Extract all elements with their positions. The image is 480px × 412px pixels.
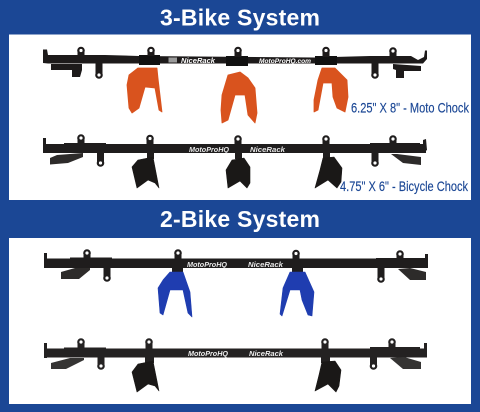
label: NiceRack: NiceRack [249, 351, 284, 358]
mounting tabs [77, 134, 397, 167]
rack: 2-bike with bicycle chocks [44, 338, 427, 392]
heading: 3-Bike System: 3-Bike System [160, 4, 320, 30]
label: MotoProHQ: MotoProHQ [189, 147, 230, 154]
hitch right [398, 268, 426, 280]
chock: orange 3 [314, 68, 348, 112]
mounting tabs [51, 47, 421, 79]
mounting tabs [77, 338, 396, 370]
mounting tabs [83, 249, 404, 283]
chock: blue 2 [280, 272, 314, 316]
chock: black 1 [132, 157, 159, 188]
chock: orange 2 [221, 72, 257, 123]
label: NiceRack: NiceRack [250, 147, 286, 154]
label: MotoProHQ: MotoProHQ [188, 351, 229, 358]
chock: blue 1 [158, 272, 192, 317]
label: MotoProHQ.com: MotoProHQ.com [259, 58, 311, 65]
label: MotoProHQ: MotoProHQ [187, 262, 228, 269]
hitch left [50, 153, 83, 164]
hitch right [391, 154, 421, 165]
rack: 3-bike with moto chocks [43, 47, 427, 123]
label: NiceRack: NiceRack [181, 56, 216, 65]
label: NiceRack: NiceRack [248, 262, 284, 269]
chock: black 2 [315, 361, 341, 392]
hitch left [61, 268, 90, 279]
hitch right [390, 357, 421, 369]
rack: 2-bike with blue chocks [44, 249, 428, 317]
chock: black 1 [132, 361, 159, 392]
flag logo [168, 58, 177, 62]
panel: 3-bike system [9, 34, 471, 200]
hitch left [51, 358, 84, 369]
chock: black 2 [226, 158, 250, 188]
panel: 2-bike system [9, 238, 471, 404]
chock: orange 1 [127, 68, 162, 113]
rack: 3-bike with bicycle chocks [43, 134, 427, 188]
heading: 2-Bike System: 2-Bike System [160, 206, 320, 232]
chock: black 3 [315, 157, 342, 188]
